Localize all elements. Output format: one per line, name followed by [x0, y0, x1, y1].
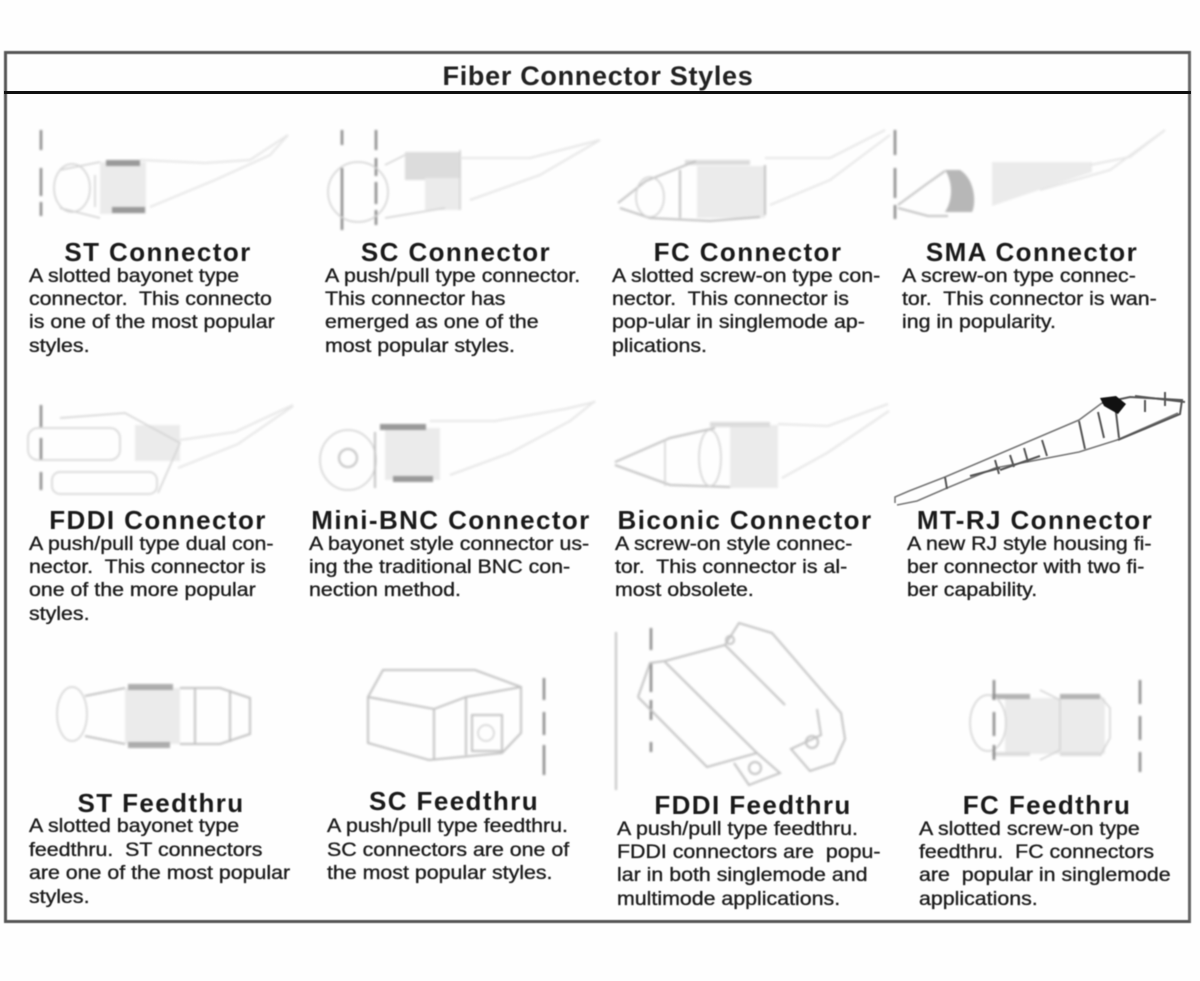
- description: FC Feedthru: are popular in singlemode: [919, 864, 1171, 886]
- description: FDDI Connector: nector. This connector is: [29, 556, 266, 578]
- description: ST Feedthru: [28, 815, 291, 908]
- description: FDDI Feedthru: FDDI connectors are popu-: [617, 841, 880, 863]
- heading: Mini-BNC Connector: Mini-BNC Connector: [311, 505, 591, 535]
- description: Mini-BNC Connector: A bayonet style connector us-: [309, 533, 589, 555]
- connector: FDDI: [28, 505, 274, 625]
- icon: SC feedthru: [368, 670, 544, 775]
- description: FC Connector: plications.: [612, 335, 707, 357]
- feedthru: FDDI: [616, 790, 880, 910]
- description: ST Connector: is one of the most popular: [29, 311, 275, 333]
- description: SMA Connector: A screw-on type connec-: [902, 265, 1136, 287]
- description: SC Connector: A push/pull type connector.: [325, 265, 580, 287]
- feedthru: FC: [918, 790, 1171, 910]
- description: FC Connector: nector. This connector is: [612, 288, 849, 310]
- description: ST Feedthru: feedthru. ST connectors: [29, 839, 262, 861]
- description: Mini-BNC Connector: ing the traditional BNC con-: [309, 556, 570, 578]
- description: ST Connector: A slotted bayonet type: [29, 265, 239, 287]
- heading: SC Feedthru: SC Feedthru: [369, 786, 539, 816]
- title: Fiber Connector Styles: [443, 61, 753, 91]
- description: Biconic Connector: tor. This connector is al-: [615, 556, 847, 578]
- description: MT-RJ Connector: A new RJ style housing fi-: [907, 533, 1151, 555]
- description: FC Feedthru: A slotted screw-on type: [919, 818, 1140, 840]
- icon: FDDI connector: [28, 405, 293, 494]
- heading: SMA Connector: SMA Connector: [926, 237, 1138, 267]
- icon: FC connector: [618, 130, 890, 221]
- description: MT-RJ Connector: ber connector with two fi-: [907, 556, 1144, 578]
- description: SC Feedthru: SC connectors are one of: [327, 839, 569, 861]
- description: Mini-BNC Connector: [308, 533, 590, 601]
- description: FDDI Feedthru: A push/pull type feedthru.: [617, 818, 858, 840]
- description: FDDI Feedthru: multimode applications.: [617, 888, 840, 910]
- icon: Biconic connector: [615, 404, 889, 488]
- description: FC Connector: pop-ular in singlemode ap-: [612, 311, 865, 333]
- description: FC Connector: [611, 265, 880, 357]
- description: ST Feedthru: are one of the most popular: [29, 862, 290, 884]
- heading: Biconic Connector: Biconic Connector: [618, 505, 872, 535]
- description: FC Feedthru: [918, 818, 1171, 910]
- connector: Biconic: [614, 505, 872, 601]
- feedthru: SC: [326, 786, 570, 884]
- description: SC Connector: This connector has: [325, 288, 505, 310]
- icon: ST connector: [41, 130, 288, 218]
- description: FC Feedthru: applications.: [919, 888, 1038, 910]
- description: SMA Connector: tor. This connector is wan-: [902, 288, 1157, 310]
- description: SC Connector: most popular styles.: [325, 335, 515, 357]
- description: MT-RJ Connector: [906, 533, 1152, 601]
- description: FC Feedthru: feedthru. FC connectors: [919, 841, 1154, 863]
- description: SMA Connector: ing in popularity.: [902, 311, 1056, 333]
- heading: ST Connector: ST Connector: [64, 237, 252, 267]
- icon: ST feedthru: [57, 684, 250, 748]
- heading: MT-RJ Connector: MT-RJ Connector: [917, 505, 1153, 535]
- description: Biconic Connector: A screw-on style connec-: [615, 533, 852, 555]
- description: SC Connector: emerged as one of the: [325, 311, 539, 333]
- description: ST Connector: styles.: [29, 335, 90, 357]
- description: FC Connector: A slotted screw-on type con-: [612, 265, 880, 287]
- description: SC Connector: [324, 265, 580, 357]
- icon: SMA connector: [895, 130, 1165, 219]
- description: FDDI Feedthru: lar in both singlemode and: [617, 864, 867, 886]
- description: ST Feedthru: A slotted bayonet type: [29, 815, 239, 837]
- description: FDDI Connector: [28, 533, 274, 625]
- description: SC Feedthru: the most popular styles.: [327, 862, 553, 884]
- connector: SMA: [901, 237, 1157, 333]
- icon: FC feedthru: [970, 680, 1140, 772]
- connector: ST: [28, 237, 276, 357]
- description: ST Connector: connector. This connecto: [29, 288, 272, 310]
- description: SMA Connector: [901, 265, 1157, 333]
- description: FDDI Connector: styles.: [29, 603, 90, 625]
- heading: FDDI Connector: FDDI Connector: [49, 505, 267, 535]
- description: Biconic Connector: most obsolete.: [615, 579, 754, 601]
- connector: Mini-BNC: [308, 505, 591, 601]
- connector: FC: [611, 237, 880, 357]
- icon: Mini-BNC connector: [320, 401, 595, 490]
- heading: SC Connector: SC Connector: [361, 237, 551, 267]
- connector: MT-RJ: [906, 505, 1153, 601]
- heading: ST Feedthru: ST Feedthru: [77, 788, 245, 818]
- icon: SC connector: [328, 130, 600, 230]
- description: ST Feedthru: styles.: [29, 886, 90, 908]
- icon: MT-RJ connector: [895, 392, 1185, 505]
- description: SC Feedthru: [326, 815, 570, 884]
- description: FDDI Feedthru: [616, 818, 880, 910]
- heading: FDDI Feedthru: FDDI Feedthru: [654, 790, 852, 820]
- connector: SC: [324, 237, 580, 357]
- description: Mini-BNC Connector: nection method.: [309, 579, 461, 601]
- description: Biconic Connector: [614, 533, 852, 601]
- description: SC Feedthru: A push/pull type feedthru.: [327, 815, 568, 837]
- description: ST Connector: [28, 265, 276, 357]
- feedthru: ST: [28, 788, 291, 908]
- description: MT-RJ Connector: ber capability.: [907, 579, 1037, 601]
- icon: FDDI feedthru: [616, 623, 845, 790]
- description: FDDI Connector: one of the more popular: [29, 579, 256, 601]
- heading: FC Connector: FC Connector: [654, 237, 842, 267]
- description: FDDI Connector: A push/pull type dual con-: [29, 533, 274, 555]
- heading: FC Feedthru: FC Feedthru: [963, 790, 1131, 820]
